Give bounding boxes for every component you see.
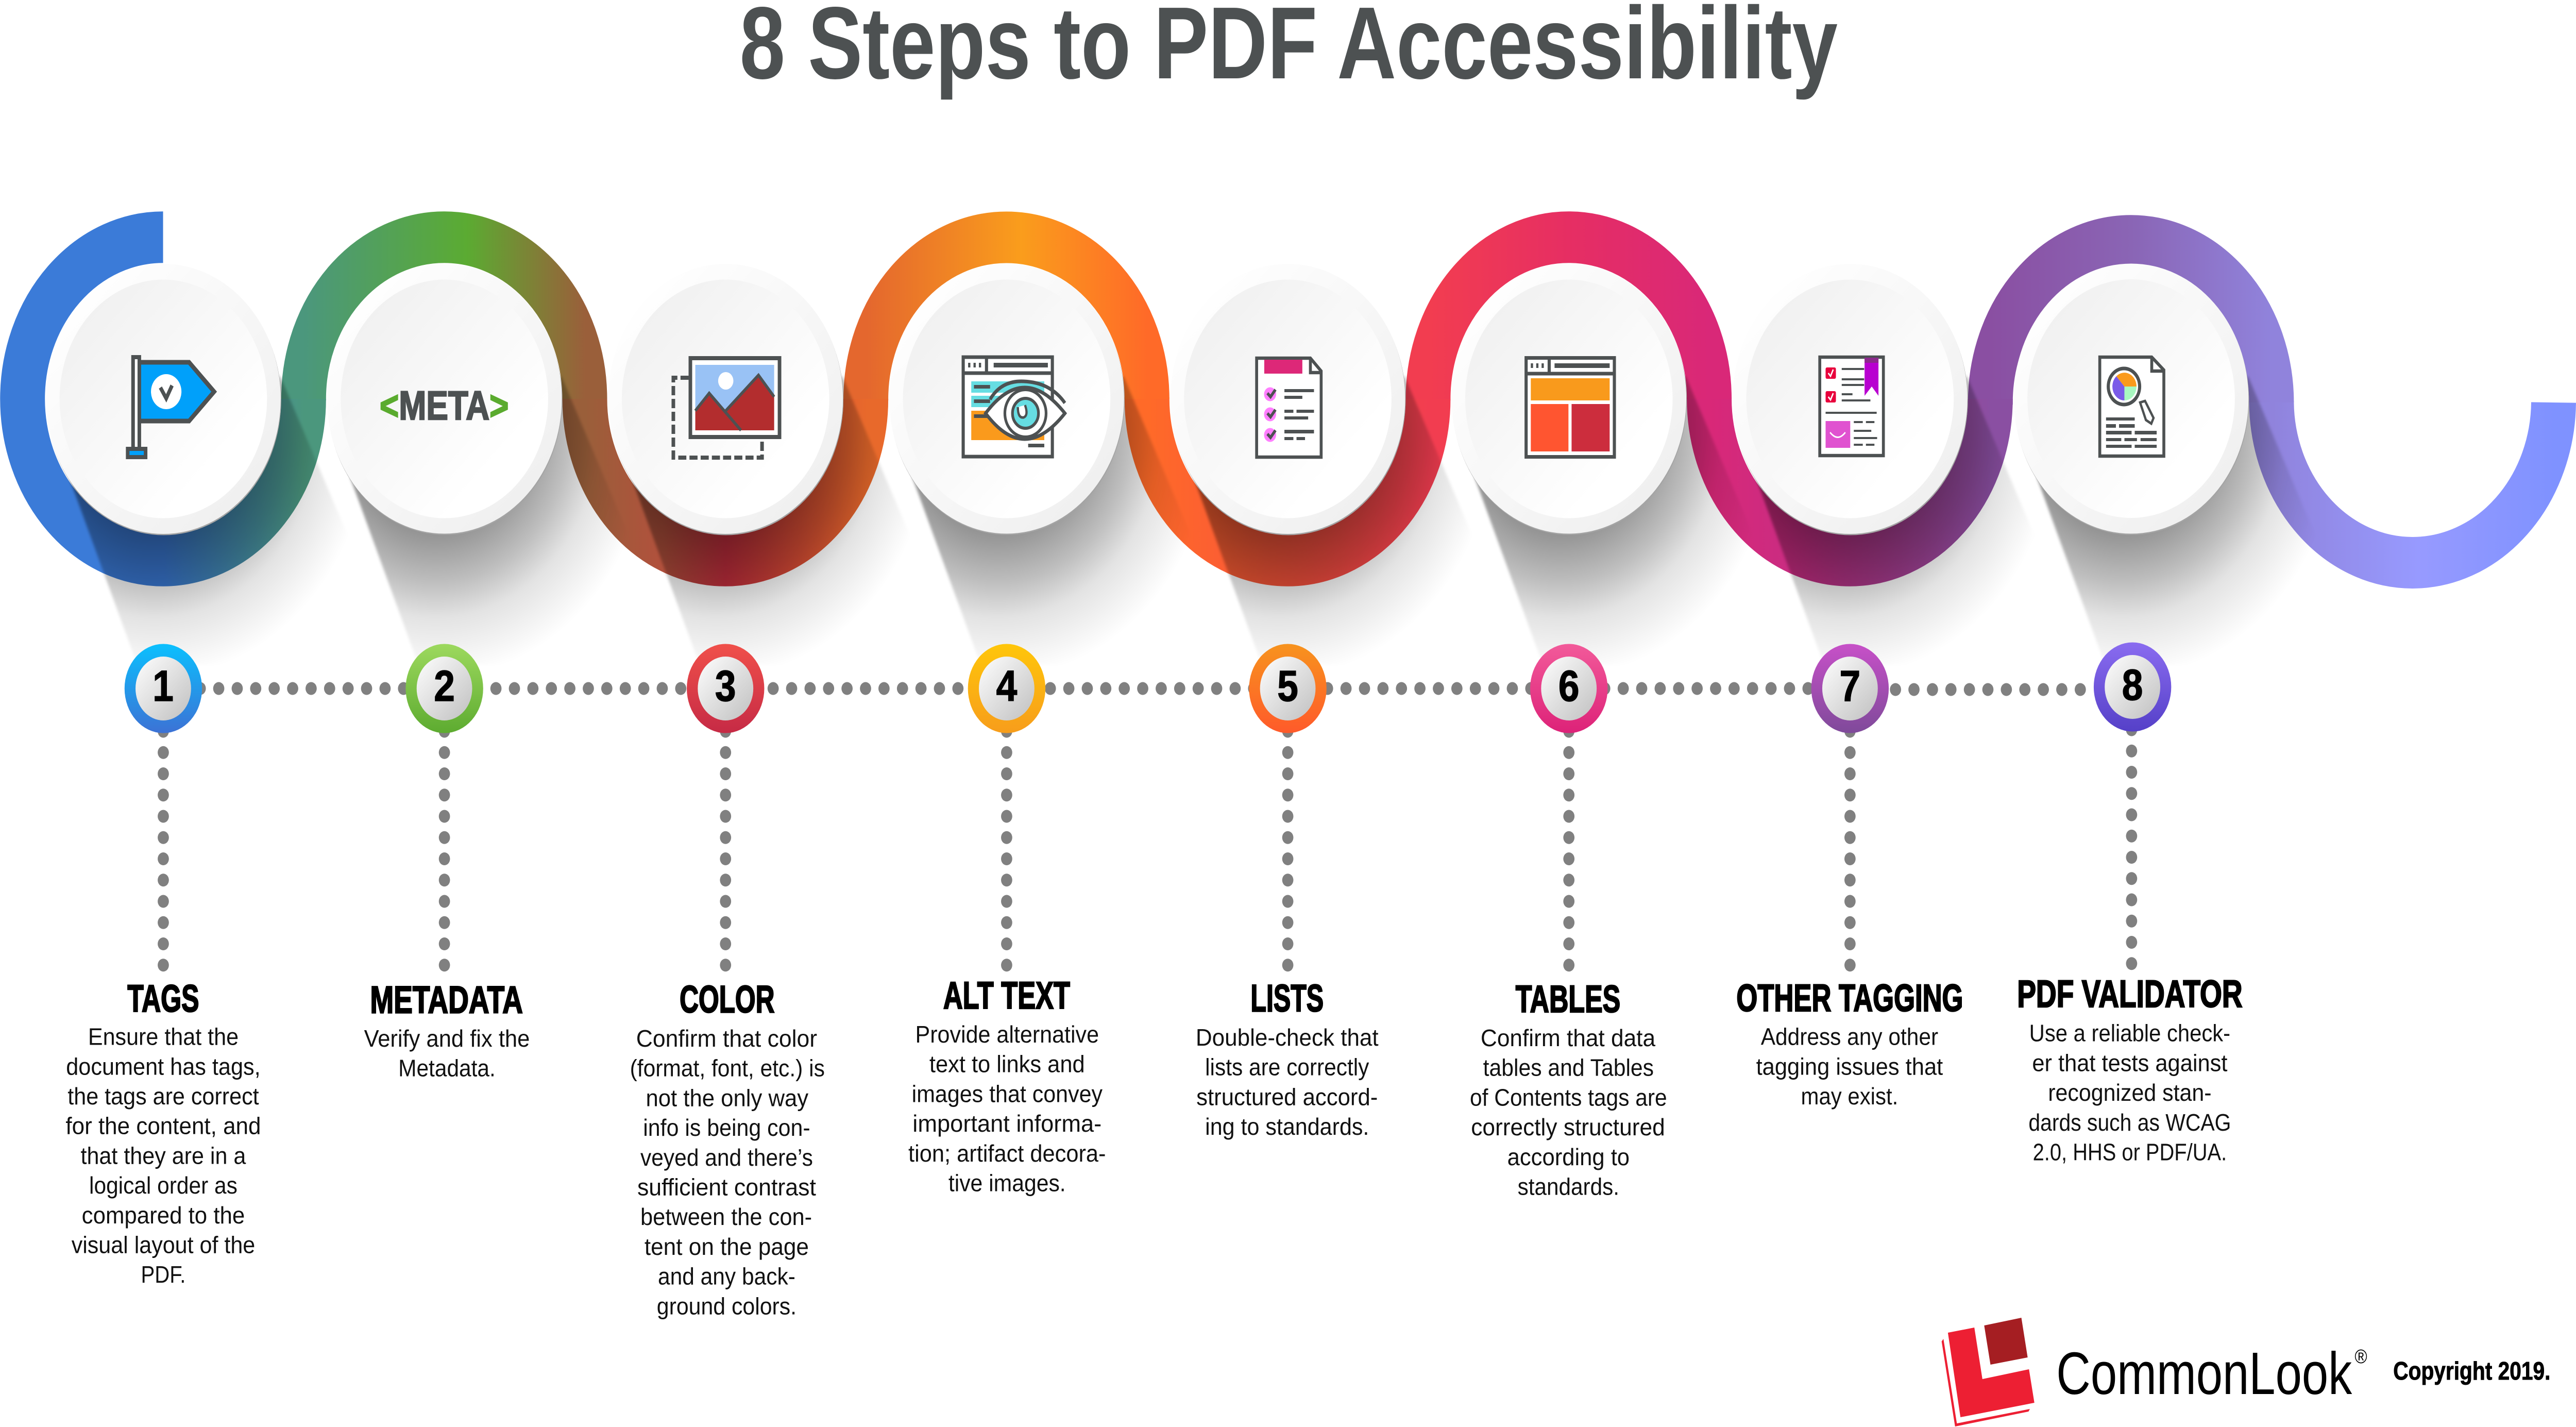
description: tables: standards. <box>1518 1174 1619 1200</box>
description: lists: lists are correctly <box>1205 1054 1369 1081</box>
description: alt text: tive images. <box>948 1170 1066 1197</box>
description: color: Confirm that color <box>636 1026 817 1052</box>
description: tags: for the content, and <box>65 1113 261 1139</box>
number badge 4 <box>968 644 1045 733</box>
panel: disc 1 tags <box>46 264 281 535</box>
text block: step 1 tags <box>65 977 261 1288</box>
description: alt text: Provide alternative <box>916 1021 1099 1048</box>
heading: other tagging: OTHER TAGGING <box>1736 977 1963 1019</box>
heading: alt text: ALT TEXT <box>943 974 1070 1017</box>
number badge 3: 3 <box>715 662 736 710</box>
number badge 1: 1 <box>152 662 174 710</box>
description: other tagging <box>1756 1024 1943 1110</box>
description: tables: tables and Tables <box>1483 1055 1654 1081</box>
number badge 6 <box>1530 644 1607 733</box>
description: color: veyed and there’s <box>640 1145 813 1171</box>
text block: step 4 alt text <box>908 974 1106 1197</box>
heading: tags: TAGS <box>127 977 199 1020</box>
description: color: ground colors. <box>657 1294 796 1320</box>
icon: form with bookmark <box>1820 357 1884 456</box>
description: tags: Ensure that the <box>88 1024 239 1050</box>
description: alt text: tion; artifact decora- <box>908 1140 1106 1167</box>
description: color: (format, font, etc.) is <box>630 1055 825 1082</box>
description: pdf validator: er that tests against <box>2032 1050 2227 1077</box>
number badge 4: 4 <box>996 662 1017 710</box>
description: pdf validator: dards such as WCAG <box>2028 1110 2231 1136</box>
description: metadata: Verify and fix the <box>364 1026 530 1052</box>
description: pdf validator <box>2028 1020 2231 1166</box>
text block: step 5 lists <box>1196 977 1379 1140</box>
description: lists: ing to standards. <box>1205 1114 1369 1140</box>
description: tags: that they are in a <box>81 1143 246 1169</box>
icon: META tag: <META> <box>380 382 509 428</box>
number badge 5 <box>1249 644 1327 733</box>
number badge 5: 5 <box>1277 662 1298 710</box>
heading: metadata: METADATA <box>370 978 523 1021</box>
description: tags: the tags are correct <box>67 1083 259 1110</box>
description: color: info is being con- <box>643 1115 810 1141</box>
description: other tagging: Address any other <box>1761 1024 1938 1050</box>
icon: checklist document <box>1257 358 1321 457</box>
number badge 7: 7 <box>1840 662 1860 710</box>
number badge 2 <box>405 644 483 733</box>
description: tags: document has tags, <box>66 1054 261 1080</box>
text block: step 7 other tagging <box>1736 977 1963 1110</box>
number badge 3 <box>687 644 764 733</box>
description: color: and any back- <box>658 1264 795 1290</box>
text block: step 8 pdf validator <box>2017 972 2243 1166</box>
number badge 8 <box>2094 642 2171 732</box>
panel: disc 7 other tagging <box>1733 264 1968 535</box>
panel: disc 4 alt text <box>889 264 1125 535</box>
description: tags: logical order as <box>89 1173 238 1199</box>
description: alt text: important informa- <box>912 1111 1101 1137</box>
logo: CommonLook mark <box>1942 1318 2035 1426</box>
number badge 1 <box>125 644 202 733</box>
description: metadata: Metadata. <box>398 1055 496 1082</box>
description: other tagging: may exist. <box>1801 1083 1898 1110</box>
panel: disc 2 metadata <box>327 264 562 535</box>
description: lists: Double-check that <box>1196 1025 1379 1051</box>
disc shadows <box>69 376 2370 665</box>
number badge 2: 2 <box>434 662 455 710</box>
description: tags <box>65 1024 261 1288</box>
icon: table layout window <box>1526 358 1615 457</box>
text block: step 6 tables <box>1470 978 1667 1200</box>
heading: lists: LISTS <box>1250 977 1324 1019</box>
registered mark: ® <box>2354 1346 2367 1368</box>
description: color: tent on the page <box>645 1234 809 1261</box>
description: color <box>630 1026 825 1320</box>
description: color: not the only way <box>646 1085 809 1112</box>
description: tables: Confirm that data <box>1481 1025 1655 1052</box>
description: pdf validator: recognized stan- <box>2048 1080 2212 1106</box>
description: color: sufficient contrast <box>637 1174 816 1201</box>
description: color: between the con- <box>640 1204 812 1231</box>
description: tables: according to <box>1507 1144 1630 1170</box>
description: other tagging: tagging issues that <box>1756 1054 1943 1080</box>
ribbon: wave band across all steps <box>23 237 2554 563</box>
number badge 6: 6 <box>1558 662 1580 710</box>
description: tables: of Contents tags are <box>1470 1085 1667 1111</box>
dotted connector: horizontal and vertical dots <box>163 689 2131 969</box>
description: lists <box>1196 1025 1379 1140</box>
number badge 7 <box>1811 644 1889 733</box>
number badge 8: 8 <box>2122 661 2143 709</box>
icon: browser window with eye <box>963 357 1065 457</box>
panel: disc 3 color <box>608 264 843 535</box>
description: pdf validator: Use a reliable check- <box>2029 1020 2230 1047</box>
logo wordmark: CommonLook <box>2056 1340 2352 1407</box>
icon: picture frame <box>673 358 779 458</box>
text block: step 2 metadata <box>364 978 530 1082</box>
heading: pdf validator: PDF VALIDATOR <box>2017 972 2243 1015</box>
description: tags: compared to the <box>82 1202 245 1229</box>
copyright note: Copyright 2019. <box>2393 1356 2550 1385</box>
heading: color: COLOR <box>680 978 774 1021</box>
description: tags: PDF. <box>141 1262 185 1288</box>
description: lists: structured accord- <box>1196 1084 1378 1111</box>
panel: disc 8 pdf validator <box>2014 264 2249 535</box>
description: metadata <box>364 1026 530 1082</box>
icon: document with magnifier and pie chart <box>2100 357 2164 456</box>
description: alt text: text to links and <box>929 1051 1085 1078</box>
description: alt text <box>908 1021 1106 1197</box>
text block: step 3 color <box>630 978 825 1320</box>
description: tables: correctly structured <box>1471 1115 1665 1141</box>
panel: disc 5 lists <box>1171 264 1405 535</box>
description: pdf validator: 2.0, HHS or PDF/UA. <box>2033 1139 2227 1166</box>
description: tables <box>1470 1025 1667 1200</box>
heading: tables: TABLES <box>1516 978 1620 1020</box>
icon: flag with check <box>128 357 214 457</box>
description: alt text: images that convey <box>912 1081 1103 1107</box>
description: tags: visual layout of the <box>72 1232 255 1258</box>
panel: disc 6 tables <box>1451 264 1687 535</box>
